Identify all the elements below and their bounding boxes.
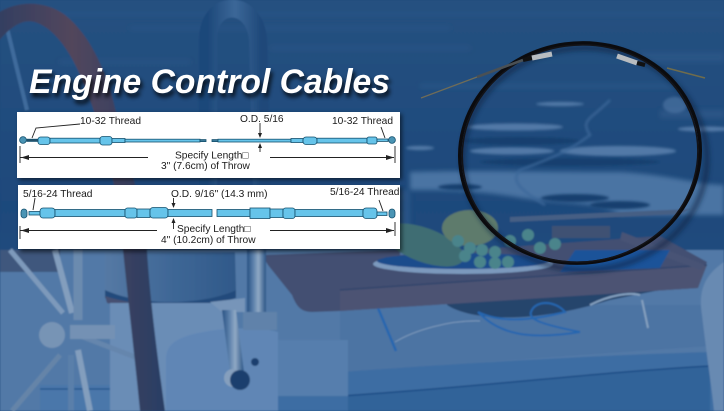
table with plate and fruit [262, 209, 707, 312]
callout labels: Specify Length□ [177, 224, 251, 235]
callout labels: 5/16-24 Thread [23, 189, 93, 200]
rope and boat shadow [378, 275, 660, 351]
panel: 10-32 thread cable diagram [17, 112, 402, 180]
leader arrows and dimension lines [20, 198, 395, 239]
ship wheel spokes and hub [7, 28, 135, 411]
panel: 5/16-24 thread cable diagram [18, 185, 402, 252]
callout labels: Specify Length□ [175, 150, 249, 162]
callout labels: O.D. 9/16" (14.3 mm) [171, 189, 267, 200]
wooden wheel rim [0, 4, 165, 411]
title: Engine Control Cables [29, 63, 390, 101]
callout labels: 10-32 Thread [332, 116, 393, 127]
cable drawing: 4 inch throw [21, 208, 395, 218]
deck and cushions [0, 250, 724, 411]
right cable end with ferrule [617, 56, 705, 78]
callout labels: 10-32 Thread [80, 116, 141, 127]
pedestal post and lever [210, 250, 277, 390]
title: Engine Control Cables [31, 67, 392, 105]
callout labels [80, 114, 393, 172]
winch pedestal [105, 252, 278, 411]
callout labels [23, 187, 400, 246]
ladder rail [208, 8, 262, 186]
leader arrows and dimension lines [20, 123, 395, 163]
callout labels: 5/16-24 Thread [330, 187, 400, 198]
cable drawing: 3 inch throw [20, 136, 395, 145]
product photo: coiled black control cable [421, 27, 715, 279]
callout labels: O.D. 5/16 [240, 114, 284, 125]
callout labels: 3" (7.6cm) of Throw [161, 161, 251, 172]
callout labels: 4" (10.2cm) of Throw [161, 235, 256, 246]
arm at right edge [701, 262, 724, 411]
left cable end with ferrule [421, 54, 552, 98]
